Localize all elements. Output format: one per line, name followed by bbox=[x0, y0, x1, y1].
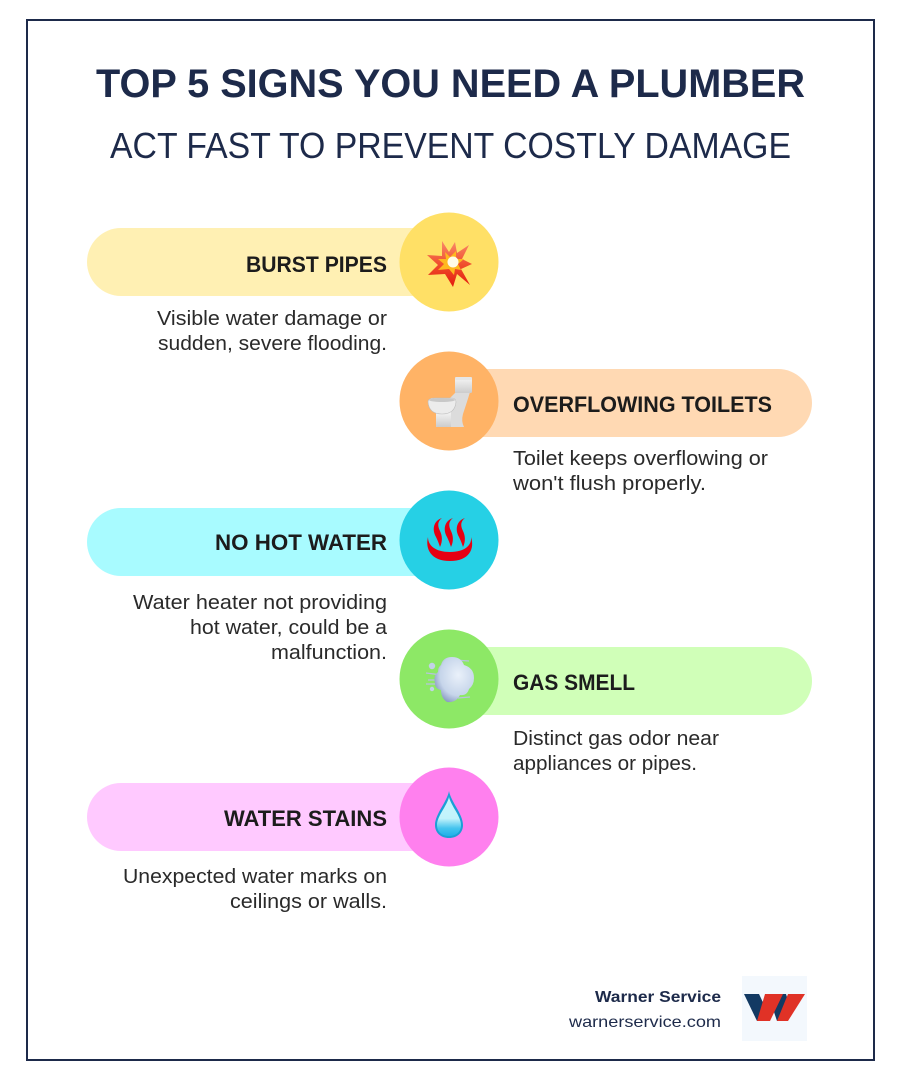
icon: collision burst bbox=[427, 241, 472, 287]
panel: water stains bbox=[87, 768, 498, 913]
icon circle: water stains bbox=[400, 768, 498, 866]
website: warnerservice.com bbox=[568, 1014, 721, 1031]
description: gas smell: Distinct gas odor near bbox=[513, 728, 719, 750]
heading: burst pipes: BURST PIPES bbox=[246, 252, 387, 277]
logo bbox=[742, 976, 807, 1041]
description: gas smell bbox=[513, 728, 719, 775]
subtitle: ACT FAST TO PREVENT COSTLY DAMAGE bbox=[110, 125, 791, 166]
icon: gas cloud bbox=[426, 657, 474, 702]
label pill: overflowing toilets bbox=[432, 369, 812, 437]
description: burst pipes: sudden, severe flooding. bbox=[158, 333, 387, 355]
description: no hot water: malfunction. bbox=[271, 642, 387, 664]
label pill: water stains bbox=[87, 783, 467, 851]
panel: gas smell bbox=[400, 630, 812, 775]
description: burst pipes bbox=[157, 308, 387, 355]
brand name: Warner Service bbox=[595, 989, 721, 1006]
description: no hot water: Water heater not providing bbox=[133, 592, 387, 614]
description: water stains: Unexpected water marks on bbox=[123, 866, 387, 888]
label pill: no hot water bbox=[87, 508, 467, 576]
description: gas smell: appliances or pipes. bbox=[513, 753, 697, 775]
panel: burst pipes bbox=[87, 212, 498, 355]
panel: overflowing toilets bbox=[400, 352, 812, 495]
icon circle: overflowing toilets bbox=[400, 352, 498, 450]
icon: toilet bbox=[428, 377, 472, 427]
heading: overflowing toilets: OVERFLOWING TOILETS bbox=[513, 392, 772, 417]
description: water stains: ceilings or walls. bbox=[230, 891, 387, 913]
label pill: gas smell bbox=[432, 647, 812, 715]
description: no hot water: hot water, could be a bbox=[190, 617, 388, 639]
description: no hot water bbox=[133, 592, 388, 664]
heading: water stains: WATER STAINS bbox=[224, 806, 387, 831]
description: overflowing toilets: won't flush properly. bbox=[512, 473, 706, 495]
title: TOP 5 SIGNS YOU NEED A PLUMBER bbox=[96, 62, 805, 106]
description: overflowing toilets: Toilet keeps overflowing or bbox=[513, 448, 768, 470]
footer: brand bbox=[568, 976, 807, 1041]
description: overflowing toilets bbox=[512, 448, 768, 495]
heading: no hot water: NO HOT WATER bbox=[215, 530, 387, 555]
label pill: burst pipes bbox=[87, 228, 467, 296]
description: burst pipes: Visible water damage or bbox=[157, 308, 387, 330]
icon: hot springs bbox=[427, 518, 472, 561]
icon: water drop bbox=[435, 791, 463, 838]
icon circle: burst pipes bbox=[400, 212, 498, 312]
description: water stains bbox=[123, 866, 387, 913]
icon circle: no hot water bbox=[400, 490, 498, 590]
panel: no hot water bbox=[87, 490, 498, 664]
heading: gas smell: GAS SMELL bbox=[513, 670, 635, 695]
icon circle: gas smell bbox=[400, 630, 498, 728]
